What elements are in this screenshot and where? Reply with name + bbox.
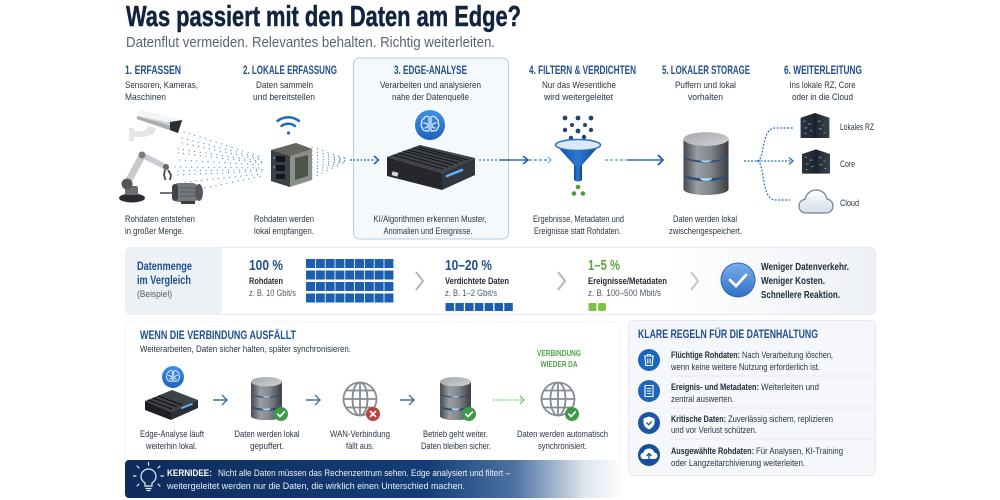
label: connection restored — [537, 348, 581, 369]
step: operation continues: Daten bleiben sicher. — [421, 440, 491, 451]
subtitle: Datenflut vermeiden. Relevantes behalten. Richtig weiterleiten. — [126, 35, 495, 51]
text: step 5 note: Daten werden lokal — [673, 213, 737, 224]
panel: step 2 Lokale Erfassung — [243, 65, 337, 236]
step: WAN connection fails — [330, 382, 390, 451]
rules card — [628, 320, 876, 476]
text: step 2 intro: Daten sammeln — [256, 79, 313, 90]
arrow: collector to edge analysis — [350, 156, 378, 164]
icon: brain — [415, 110, 445, 140]
icon: storage cylinder — [683, 132, 729, 195]
stat: condensed data 10 to 20 percent — [445, 257, 509, 298]
text: step 1 intro: Sensoren, Kameras, — [125, 79, 198, 90]
stat: condensed data 10 to 20 percent: 10–20 % — [445, 257, 492, 274]
bar row: condensed data blocks — [446, 303, 513, 311]
label: connection restored: VERBINDUNG — [537, 348, 581, 358]
stat: condensed data 10 to 20 percent: Verdichtete Daten — [445, 275, 509, 286]
text: step 3 note: KI/Algorithmen erkennen Muster, — [374, 213, 486, 224]
text: step 3 note — [374, 213, 486, 236]
text: step 5 intro: vorhalten — [688, 91, 723, 102]
rule: events and metadata — [638, 380, 819, 404]
icon: wifi — [278, 117, 299, 135]
benefits text: Weniger Kosten. — [761, 275, 825, 287]
icon: funnel — [556, 140, 600, 182]
step: edge analysis continues: weiterhin lokal. — [145, 440, 197, 451]
step: data synchronised: Daten werden automatisch — [517, 428, 608, 439]
label: connection restored: WIEDER DA — [540, 359, 578, 369]
text: step 1 note — [125, 213, 195, 236]
step: WAN connection fails: fällt aus. — [346, 440, 374, 451]
icon: filtered green dots — [572, 185, 585, 196]
panel: when the connection fails — [126, 322, 620, 472]
heading: failure panel: WENN DIE VERBINDUNG AUSFÄLLT — [140, 329, 296, 342]
icon: core data center — [802, 149, 830, 174]
rule: volatile raw data: Nach Verarbeitung löschen, — [742, 349, 833, 360]
text: step 2 intro: und bereitstellen — [253, 91, 315, 102]
rule: events and metadata: zentral auswerten. — [671, 393, 734, 404]
highlighted card — [354, 58, 508, 239]
stat: raw data 100 percent: Rohdaten — [249, 275, 283, 286]
text: step 6 intro: oder in die Cloud — [792, 91, 853, 102]
panel: step 1 Erfassen — [119, 65, 203, 236]
arrow: dotted green — [493, 396, 524, 404]
text: step 3 intro — [380, 79, 481, 102]
icon: light bulb — [134, 462, 164, 490]
text: failure intro: Weiterarbeiten, Daten sicher halten, später synchronisieren. — [140, 343, 351, 354]
rule: selected raw data: oder Langzeitarchivierung weiterleiten. — [671, 457, 805, 468]
rule: volatile raw data — [638, 349, 833, 372]
text: step 6 intro — [790, 79, 856, 102]
stat: events and metadata 1 to 5 percent: Ereignisse/Metadaten — [588, 275, 667, 286]
text: step 4 note: Ereignisse statt Rohdaten. — [534, 225, 621, 236]
panel: data retention rules — [628, 320, 876, 476]
text: step 3 intro: Verarbeiten und analysieren — [380, 79, 481, 90]
rule: critical data: Zuverlässig sichern, replizieren — [728, 413, 833, 424]
heading: step 5: 5. LOKALER STORAGE — [662, 65, 750, 77]
stat: events and metadata 1 to 5 percent: 1–5 % — [588, 257, 620, 274]
arrow: edge analysis to filter — [479, 156, 551, 164]
step: data buffered locally: Daten werden lokal — [234, 428, 300, 439]
banner: key idea — [125, 460, 625, 498]
rule: selected raw data: Für Analysen, KI-Training — [756, 445, 843, 456]
icon: data dots — [563, 116, 593, 144]
comparison card — [126, 248, 876, 314]
rule: critical data: Kritische Daten: — [671, 413, 726, 424]
arrow — [400, 395, 414, 405]
step: edge analysis continues: Edge-Analyse läuft — [140, 428, 204, 439]
text: step 4 intro — [542, 79, 616, 102]
text: step 2 note — [254, 213, 314, 236]
title: Was passiert mit den Daten am Edge? — [126, 1, 521, 33]
rule: selected raw data — [638, 444, 843, 468]
step: data synchronised — [517, 382, 608, 451]
rule: selected raw data: Ausgewählte Rohdaten: — [671, 445, 754, 456]
label block: Datenmenge — [137, 259, 192, 273]
label: Core: Core — [840, 158, 855, 169]
rule: events and metadata: Weiterleiten und — [761, 381, 819, 392]
bar grid: raw data blocks — [306, 259, 393, 302]
text: step 2 intro — [253, 79, 315, 102]
text: step 5 note: zwischengespeichert. — [669, 225, 742, 236]
stat: raw data 100 percent: z. B. 10 Gbit/s — [249, 288, 296, 298]
text: step 6 intro: Ins lokale RZ, Core — [790, 79, 856, 90]
heading: step 6: 6. WEITERLEITUNG — [784, 65, 862, 77]
stat: raw data 100 percent: 100 % — [249, 257, 283, 274]
panel: step 3 Edge-Analyse — [354, 58, 508, 239]
icon: motor — [160, 183, 203, 204]
arrow — [306, 395, 320, 405]
panel: step 6 Weiterleitung — [784, 65, 874, 213]
icon: robot arm — [119, 152, 171, 202]
text: step 2 note: lokal empfangen. — [254, 225, 314, 236]
heading: rules: KLARE REGELN FÜR DIE DATENHALTUNG — [638, 328, 818, 341]
rule: critical data — [638, 412, 833, 435]
text: step 5 intro: Puffern und lokal — [675, 79, 736, 90]
label block: (Beispiel) — [137, 289, 172, 299]
stat: events and metadata 1 to 5 percent — [588, 257, 667, 298]
step: WAN connection fails: WAN-Verbindung — [330, 428, 390, 439]
text: step 1 intro — [125, 79, 198, 102]
step: operation continues: Betrieb geht weiter. — [423, 428, 488, 439]
text: key idea — [166, 468, 511, 492]
heading: step 4: 4. FILTERN & VERDICHTEN — [529, 65, 636, 77]
text: step 1 note: in großer Menge. — [125, 225, 184, 236]
text: step 1 note: Rohdaten entstehen — [125, 213, 195, 224]
text: step 5 intro — [675, 79, 736, 102]
text: step 4 note: Ergebnisse, Metadaten und — [533, 213, 624, 224]
panel: step 4 Filtern und Verdichten — [529, 65, 636, 236]
benefits text — [761, 261, 849, 301]
icon: edge gateway device — [271, 143, 312, 187]
text: key idea: Nicht alle Daten müssen das Rechenzentrum sehen. Edge analysiert und filtert – — [218, 468, 511, 479]
text: step 3 note: Anomalien und Ereignisse. — [384, 225, 472, 236]
step: data buffered locally — [234, 377, 300, 451]
text: step 4 note — [533, 213, 624, 236]
text: step 2 note: Rohdaten werden — [254, 213, 314, 224]
text: key idea: KERNIDEE: — [167, 468, 212, 479]
label: Cloud: Cloud — [840, 197, 859, 208]
rule: critical data: und vor Verlust schützen. — [671, 424, 757, 435]
text: step 5 note — [669, 213, 742, 236]
chevron 1 — [416, 272, 423, 290]
arrow: storage to three destinations — [744, 128, 793, 200]
heading: step 2: 2. LOKALE ERFASSUNG — [243, 65, 337, 77]
heading: step 1: 1. ERFASSEN — [125, 65, 181, 77]
icon: local data center — [801, 113, 829, 138]
icon: cloud — [799, 190, 833, 213]
icon: security camera — [129, 110, 183, 141]
benefits text: Schnellere Reaktion. — [761, 289, 840, 301]
panel: step 5 Lokaler Storage — [662, 65, 750, 236]
arrow — [213, 395, 227, 405]
step: data synchronised: synchronisiert. — [538, 440, 587, 451]
step: operation continues — [421, 377, 491, 451]
failure card — [126, 322, 620, 472]
stat: events and metadata 1 to 5 percent: z. B. 100–500 Mbit/s — [588, 288, 661, 298]
chevron 3 — [691, 272, 698, 290]
chevron 2 — [558, 272, 565, 290]
panel: data volume comparison — [126, 248, 876, 314]
banner background — [125, 460, 625, 498]
data stream: sensors to collector — [175, 132, 345, 188]
step: edge analysis continues — [140, 366, 204, 451]
arrow: filter to storage — [605, 155, 663, 165]
text: step 1 intro: Maschinen — [125, 91, 166, 102]
label block: im Vergleich — [137, 273, 191, 287]
rule: events and metadata: Ereignis- und Metadaten: — [671, 381, 759, 392]
stat: condensed data 10 to 20 percent: z. B. 1–2 Gbit/s — [445, 288, 497, 298]
rule: volatile raw data: wenn keine weitere Nutzung erforderlich ist. — [670, 361, 820, 372]
text: key idea: weitergeleitet werden nur die Daten, die wirklich einen Unterschied machen. — [166, 481, 465, 492]
text: step 3 intro: nahe der Datenquelle — [392, 91, 469, 102]
text: step 4 intro: Nur das Wesentliche — [542, 79, 616, 90]
stat: raw data 100 percent — [249, 257, 296, 298]
heading: step 3: 3. EDGE-ANALYSE — [394, 65, 467, 77]
label: Lokales RZ: Lokales RZ — [840, 121, 874, 132]
text: step 4 intro: wird weitergeleitet — [543, 91, 613, 102]
icon: edge server box — [387, 145, 475, 190]
icon: check badge — [721, 263, 755, 297]
rule: volatile raw data: Flüchtige Rohdaten: — [671, 349, 740, 360]
label block — [126, 248, 222, 314]
benefits text: Weniger Datenverkehr. — [761, 261, 849, 273]
bar row: event blocks — [588, 303, 606, 311]
step: data buffered locally: gepuffert. — [250, 440, 284, 451]
